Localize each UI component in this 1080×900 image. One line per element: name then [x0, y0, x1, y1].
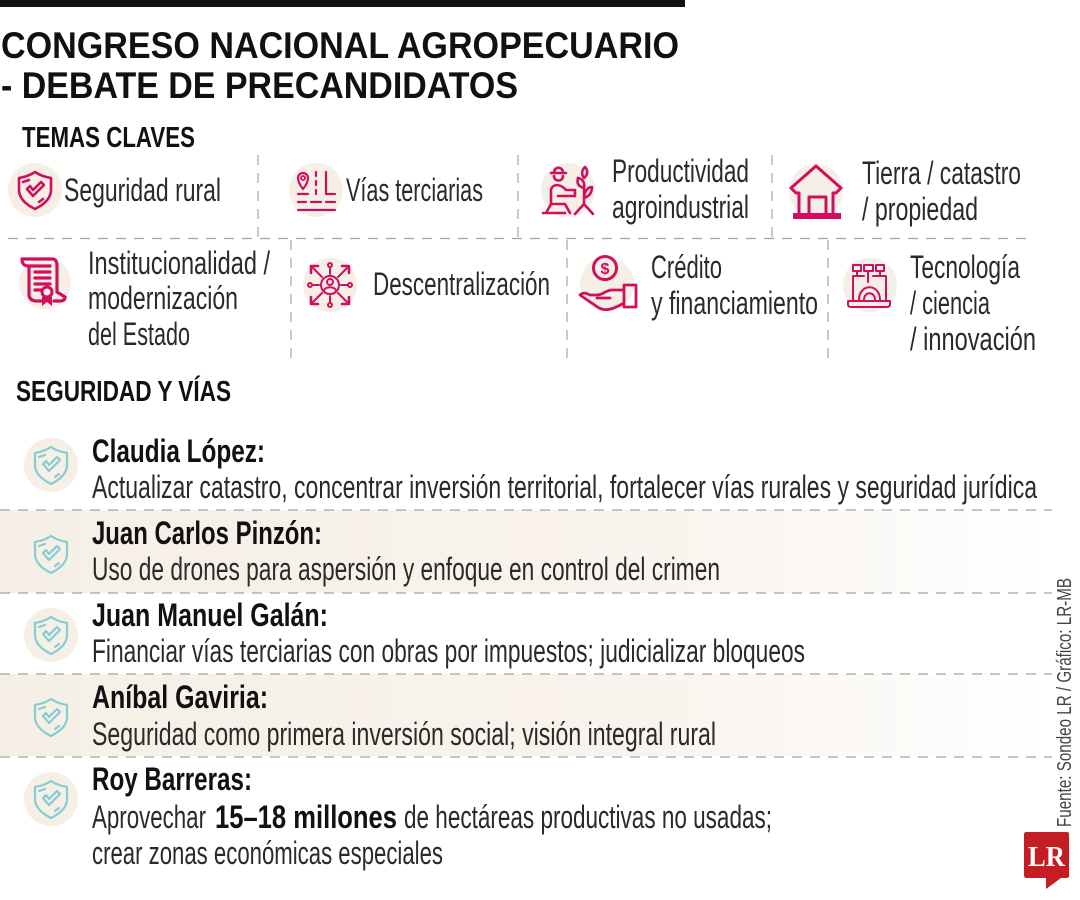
tema: tierra catastro propiedad — [789, 155, 1021, 227]
candidato: roy barreras — [24, 761, 772, 871]
candidato: roy barreras: de hectáreas productivas no usadas; — [404, 799, 772, 835]
panel: temas claves — [8, 153, 1036, 357]
tema: descentralizacion: Descentralización — [373, 266, 550, 302]
tema: tecnologia ciencia innovacion: / ciencia — [910, 285, 990, 321]
logo LR — [1024, 832, 1069, 889]
source note: Fuente: Sondeo LR / Gráfico: LR-MB — [1054, 578, 1076, 827]
title: - DEBATE DE PRECANDIDATOS — [1, 65, 518, 106]
candidato: juan manuel galan: Financiar vías terciarias con obras por impuestos; judicializar bloqueos — [92, 633, 805, 669]
tema: tierra catastro propiedad: / propiedad — [862, 191, 978, 227]
title — [1, 25, 679, 106]
tema: tecnologia ciencia innovacion: Tecnología — [910, 249, 1020, 285]
title: CONGRESO NACIONAL AGROPECUARIO — [1, 25, 679, 66]
logo LR: LR — [1028, 841, 1066, 873]
candidato: claudia lopez — [24, 433, 1037, 505]
tema: credito y financiamiento — [580, 249, 818, 321]
candidato: juan carlos pinzon — [35, 515, 720, 587]
tema: vias terciarias: Vías terciarias — [346, 172, 483, 208]
tema: institucionalidad — [19, 245, 270, 352]
candidato: roy barreras: Roy Barreras: — [92, 761, 252, 797]
tema: credito y financiamiento: $ — [601, 261, 610, 278]
candidato: claudia lopez: Claudia López: — [92, 433, 265, 469]
tema: tecnologia ciencia innovacion — [843, 249, 1036, 357]
heading: temas claves: TEMAS CLAVES — [22, 122, 195, 154]
tema: productividad agroindustrial: Productividad — [612, 153, 749, 189]
candidato: anibal gaviria: Seguridad como primera inversión social; visión integral rural — [92, 716, 716, 752]
tema: tecnologia ciencia innovacion: / innovación — [910, 321, 1036, 357]
candidato: juan carlos pinzon: Juan Carlos Pinzón: — [92, 515, 322, 551]
heading: seguridad y vias: SEGURIDAD Y VÍAS — [16, 374, 231, 408]
tema: tierra catastro propiedad: Tierra / catastro — [862, 155, 1021, 191]
candidato: anibal gaviria: Aníbal Gaviria: — [92, 679, 268, 715]
tema: descentralizacion — [303, 258, 550, 312]
tema: productividad agroindustrial: agroindustrial — [612, 189, 749, 225]
tema: vias terciarias — [289, 163, 483, 217]
tema: seguridad rural: Seguridad rural — [64, 172, 221, 208]
candidato: roy barreras: Aprovechar — [92, 799, 206, 835]
tema: credito y financiamiento: y financiamiento — [651, 285, 818, 321]
tema: institucionalidad: Institucionalidad / — [88, 245, 270, 281]
tema: productividad agroindustrial — [541, 153, 749, 225]
candidato: roy barreras: crear zonas económicas especiales — [92, 835, 443, 871]
tema: institucionalidad: del Estado — [88, 316, 190, 352]
tema: credito y financiamiento: Crédito — [651, 249, 722, 285]
tema: seguridad rural — [8, 163, 221, 217]
candidato: juan manuel galan — [24, 597, 805, 669]
top rule — [0, 0, 685, 7]
candidato: juan manuel galan: Juan Manuel Galán: — [92, 597, 328, 633]
panel: seguridad y vias — [24, 433, 1037, 871]
candidato: anibal gaviria — [35, 679, 716, 752]
candidato: juan carlos pinzon: Uso de drones para aspersión y enfoque en control del crimen — [92, 551, 720, 587]
tema: institucionalidad: modernización — [88, 280, 238, 316]
candidato: roy barreras: 15–18 millones — [215, 799, 397, 835]
